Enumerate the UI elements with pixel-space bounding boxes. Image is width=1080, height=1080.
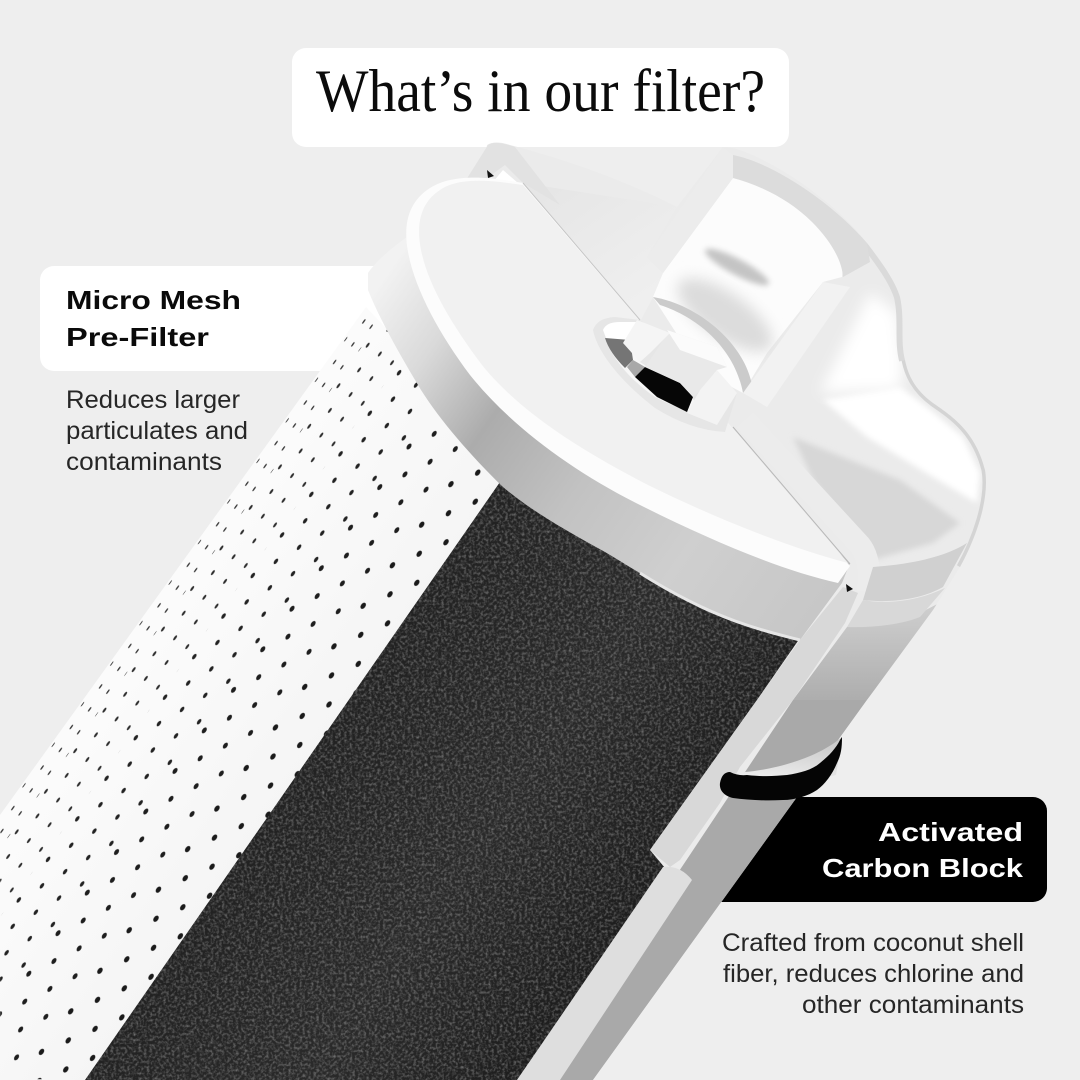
text: micro mesh description: particulates and [66, 417, 248, 445]
frosted back body [460, 140, 990, 1080]
side strips and seal ring [517, 587, 858, 1080]
label: activated carbon block [660, 797, 1047, 902]
text: activated carbon description: other contaminants [802, 991, 1024, 1019]
filter cartridge illustration [0, 140, 990, 1080]
text: activated carbon description: fiber, reduces chlorine and [723, 960, 1024, 988]
text: activated carbon description [722, 929, 1024, 1019]
cap wall lower lip [640, 573, 800, 640]
lid tab [466, 143, 560, 205]
title [292, 48, 789, 147]
activated carbon block [80, 480, 810, 1080]
label: activated carbon block: Activated [878, 817, 1023, 847]
label: micro mesh pre-filter: Pre-Filter [66, 322, 209, 352]
text: activated carbon description: Crafted from coconut shell [722, 929, 1024, 957]
cap side wall [368, 237, 850, 640]
text: micro mesh description: Reduces larger [66, 386, 240, 414]
label: micro mesh pre-filter [40, 266, 420, 371]
micro mesh pre-filter sheet [0, 318, 499, 1080]
centre outlet hole [593, 317, 737, 432]
handle [647, 147, 870, 407]
text: micro mesh description: contaminants [66, 448, 222, 476]
seam line and marker [523, 183, 853, 592]
title: What’s in our filter? [316, 58, 765, 124]
label: activated carbon block: Carbon Block [822, 853, 1024, 883]
cap face [419, 181, 848, 563]
text: micro mesh description [66, 386, 248, 476]
cap face rim [406, 178, 850, 583]
label: micro mesh pre-filter: Micro Mesh [66, 285, 241, 315]
